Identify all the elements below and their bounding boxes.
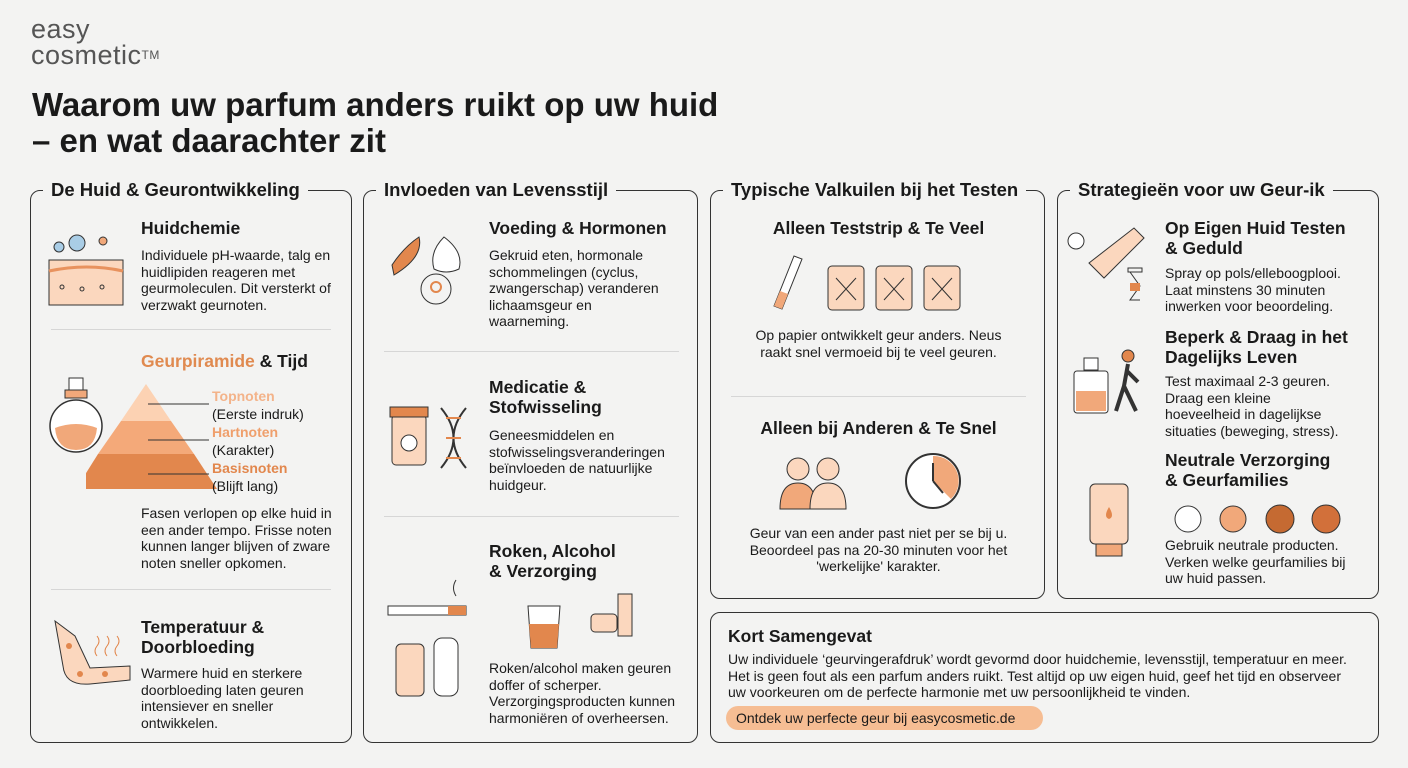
heading: Kort Samengevat	[728, 626, 872, 646]
icon: arm heat	[54, 620, 130, 685]
title: – en wat daarachter zit	[32, 122, 386, 159]
pyramid labels: Hartnoten	[212, 424, 278, 440]
text: Roken/alcohol maken geuren doffer of scherper. Verzorgingsproducten kunnen harmoniëren of overheersen.	[489, 660, 675, 726]
heading: temperatuur: Temperatuur &	[141, 617, 264, 637]
panel: summary	[710, 612, 1379, 743]
button: CTA: Ontdek uw perfecte geur bij easycosmetic.de	[736, 710, 1015, 726]
text: Warmere huid en sterkere doorbloeding laten geuren intensiever en sneller ontwikkelen.	[141, 665, 304, 730]
text: Typische Valkuilen bij het Testen	[731, 179, 1018, 200]
pyramid labels: (Eerste indruk)	[212, 406, 304, 422]
panel: skin	[30, 190, 352, 743]
icon: hand spray	[1068, 227, 1145, 300]
heading: Beperk & Draag in het	[1165, 327, 1348, 347]
text: Uw individuele ‘geurvingerafdruk’ wordt gevormd door huidchemie, levensstijl, temperatuur en meer. Het is geen fout als een parfum anders ruikt. Test altijd op uw eigen huid, geef het tijd en observeer uw voorkeuren om de perfecte harmonie met uw persoonlijkheid te vinden.	[728, 651, 1347, 700]
logo: cosmeticTM	[31, 40, 160, 70]
text: Invloeden van Levensstijl	[384, 179, 608, 200]
text: Spray op pols/elleboogplooi. Laat minstens 30 minuten inwerken voor beoordeling.	[1165, 265, 1341, 314]
heading: temperatuur: Doorbloeding	[141, 637, 255, 657]
heading: Alleen Teststrip & Te Veel	[773, 218, 984, 238]
heading: Dagelijks Leven	[1165, 347, 1297, 367]
heading: Stofwisseling	[489, 397, 602, 417]
panel: pitfalls	[710, 190, 1045, 599]
pyramid labels: Topnoten	[212, 388, 275, 404]
heading	[489, 541, 616, 581]
heading: Op Eigen Huid Testen	[1165, 218, 1346, 238]
text: Fasen verlopen op elke huid in een ander tempo. Frisse noten kunnen langer blijven of zware noten sneller opkomen.	[141, 505, 332, 570]
text: De Huid & Geurontwikkeling	[51, 179, 300, 200]
pyramid labels	[212, 388, 304, 494]
heading: & Geurfamilies	[1165, 470, 1289, 490]
button: CTA	[726, 706, 1043, 730]
icon: pills dna	[390, 406, 467, 469]
pyramid labels: (Blijft lang)	[212, 478, 278, 494]
icon: bottle walking	[1074, 350, 1140, 414]
heading	[1165, 218, 1346, 258]
text: Geur van een ander past niet per se bij u. Beoordeel pas na 20-30 minuten voor het 'werkelijke' karakter.	[750, 525, 1007, 574]
text: Geneesmiddelen en stofwisselingsveranderingen beïnvloeden de natuurlijke huidgeur.	[489, 427, 665, 492]
text: Gebruik neutrale producten. Verken welke geurfamilies bij uw huid passen.	[1165, 537, 1346, 586]
heading: pyramid: Geurpiramide & Tijd	[141, 351, 308, 371]
text: Strategieën voor uw Geur-ik	[1078, 179, 1325, 200]
icon: perfume bottle	[49, 378, 103, 453]
heading	[489, 377, 602, 417]
heading: Medicatie &	[489, 377, 586, 397]
heading: Huidchemie: Huidchemie	[141, 218, 240, 238]
icon: people clock	[780, 453, 961, 510]
icon: skin layers	[48, 234, 124, 306]
icon: strip bottles	[773, 255, 960, 310]
heading: Roken, Alcohol	[489, 541, 616, 561]
logo	[31, 14, 160, 70]
heading: Alleen bij Anderen & Te Snel	[760, 418, 997, 438]
pyramid labels: Basisnoten	[212, 460, 287, 476]
heading: temperatuur	[141, 617, 264, 657]
icon: food hormones	[392, 236, 460, 304]
heading: Neutrale Verzorging	[1165, 450, 1330, 470]
heading: Voeding & Hormonen	[489, 218, 667, 238]
title	[32, 86, 718, 159]
logo: easy	[31, 14, 90, 44]
chart: pyramid	[86, 384, 217, 489]
icon: tube and families	[1090, 484, 1340, 556]
icon: cigarette alcohol care	[388, 580, 632, 696]
text: Individuele pH-waarde, talg en huidlipiden reageren met geurmoleculen. Dit versterkt of verzwakt geurnoten.	[141, 247, 331, 312]
heading	[1165, 327, 1348, 367]
panel: strategies	[1057, 190, 1379, 599]
text: Test maximaal 2-3 geuren. Draag een kleine hoeveelheid in dagelijkse situaties (beweging, stress).	[1165, 373, 1339, 438]
heading: & Verzorging	[489, 561, 597, 581]
text: Gekruid eten, hormonale schommelingen (cyclus, zwangerschap) veranderen lichaamsgeur en waarneming.	[489, 247, 659, 329]
title: Waarom uw parfum anders ruikt op uw huid	[32, 86, 718, 123]
heading: & Geduld	[1165, 238, 1243, 258]
pyramid labels: (Karakter)	[212, 442, 274, 458]
heading	[1165, 450, 1330, 490]
text: Op papier ontwikkelt geur anders. Neus raakt snel vermoeid bij te veel geuren.	[756, 327, 1001, 360]
panel: lifestyle	[363, 190, 698, 743]
